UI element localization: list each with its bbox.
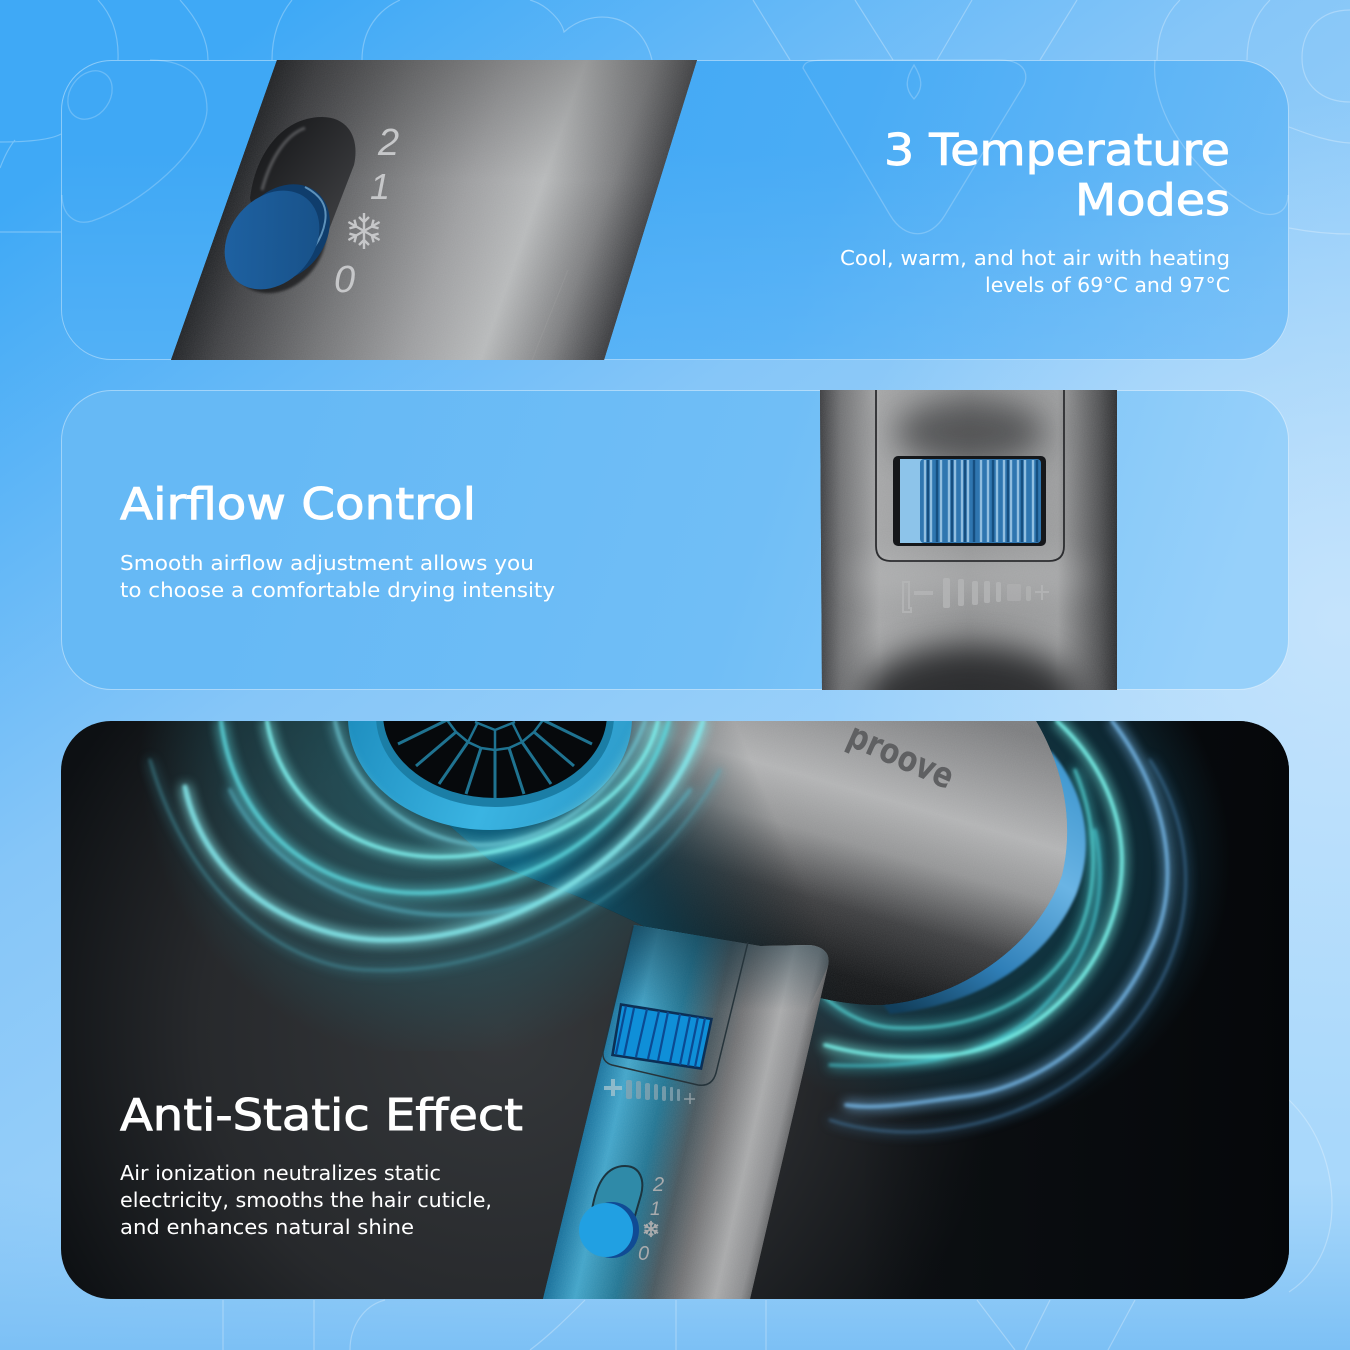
nozzle with mesh bbox=[348, 721, 632, 830]
dryer body closeup bbox=[171, 60, 697, 360]
temperature scale: 1 bbox=[370, 166, 390, 207]
heading: Anti-Static Effect: Anti-Static Effect bbox=[120, 1090, 523, 1141]
airflow rings: left bbox=[150, 721, 720, 970]
airflow scale bbox=[604, 1079, 695, 1104]
temperature scale: 1 bbox=[650, 1199, 661, 1220]
heading: 3 Temperature Modes: 3 Temperature bbox=[884, 125, 1230, 176]
description: temperature: levels of 69°C and 97°C bbox=[985, 273, 1230, 297]
heading: 3 Temperature Modes bbox=[884, 125, 1230, 226]
temperature scale: 0 bbox=[334, 259, 355, 301]
description: airflow: Smooth airflow adjustment allows you bbox=[120, 551, 534, 575]
temperature scale: 2 bbox=[377, 122, 399, 164]
airflow wheel bbox=[611, 1003, 713, 1070]
temperature slider bbox=[205, 117, 356, 313]
description: temperature bbox=[840, 246, 1230, 297]
airflow wheel bbox=[893, 456, 1046, 546]
description: anti-static bbox=[120, 1161, 492, 1239]
dryer body bbox=[420, 716, 1067, 1005]
heading: Airflow Control: Airflow Control bbox=[120, 479, 476, 530]
description: temperature: Cool, warm, and hot air with heating bbox=[840, 246, 1230, 270]
temperature scale bbox=[334, 122, 399, 301]
description: airflow bbox=[120, 551, 555, 602]
description: anti-static: electricity, smooths the hair cuticle, bbox=[120, 1188, 492, 1212]
description: airflow: to choose a comfortable drying intensity bbox=[120, 578, 555, 602]
panel: temperature modes bbox=[59, 60, 1288, 360]
airflow scale bbox=[903, 578, 1049, 612]
dryer handle closeup bbox=[820, 390, 1117, 690]
temperature scale: 0 bbox=[638, 1243, 649, 1265]
temperature scale bbox=[638, 1177, 664, 1260]
brand logo: proove bbox=[841, 716, 960, 798]
panel: anti-static effect bbox=[61, 721, 1289, 1299]
blue rear rim bbox=[880, 750, 1086, 1014]
temperature scale: 2 bbox=[652, 1174, 664, 1196]
heading: 3 Temperature Modes: Modes bbox=[1075, 175, 1230, 226]
airflow rings: right bbox=[822, 721, 1186, 1132]
temperature slider bbox=[579, 1166, 642, 1258]
dryer handle bbox=[543, 925, 829, 1299]
description: anti-static: Air ionization neutralizes static bbox=[120, 1161, 441, 1185]
description: anti-static: and enhances natural shine bbox=[120, 1215, 414, 1239]
panel: airflow control bbox=[61, 390, 1289, 690]
